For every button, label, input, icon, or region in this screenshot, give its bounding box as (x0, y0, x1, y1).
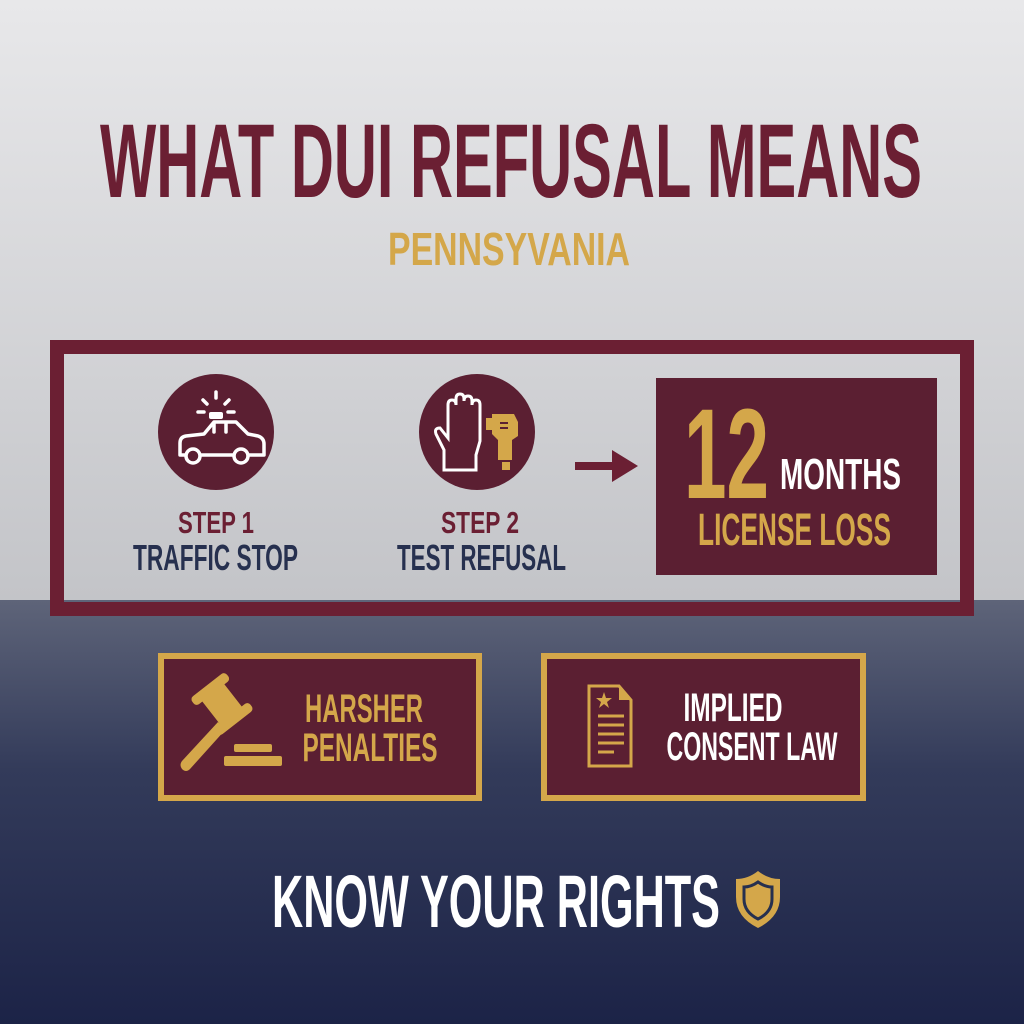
callout: 12 months (656, 378, 937, 575)
step 2 label: TEST REFUSAL (397, 537, 566, 578)
icon: shield (736, 871, 780, 928)
step 1 label: TRAFFIC STOP (133, 537, 298, 578)
callout: 12 months: LICENSE LOSS (698, 504, 891, 555)
panel: implied consent law: CONSENT LAW (666, 725, 838, 769)
icon: police car (158, 374, 274, 490)
footer: know your rights (272, 860, 780, 943)
icon: hand and breathalyzer (419, 374, 535, 490)
subtitle: PENNSYVANIA (388, 223, 630, 275)
icon: document (589, 686, 631, 766)
panel: harsher penalties (161, 656, 479, 798)
panel: harsher penalties: HARSHER (305, 687, 423, 731)
panel: implied consent law: IMPLIED (684, 686, 782, 730)
panel: harsher penalties: PENALTIES (302, 726, 438, 770)
arrow (575, 450, 638, 482)
panel: implied consent law (544, 656, 863, 798)
step 2 label: STEP 2 (441, 505, 519, 540)
panel: process (57, 347, 967, 609)
callout: 12 months: MONTHS (780, 450, 901, 499)
callout: 12 months: 12 (684, 383, 769, 526)
step 1 label: STEP 1 (178, 505, 254, 540)
icon: gavel (180, 672, 282, 771)
step 1 label (133, 505, 298, 578)
step 2 label (397, 505, 566, 578)
footer: know your rights: KNOW YOUR RIGHTS (272, 860, 720, 943)
